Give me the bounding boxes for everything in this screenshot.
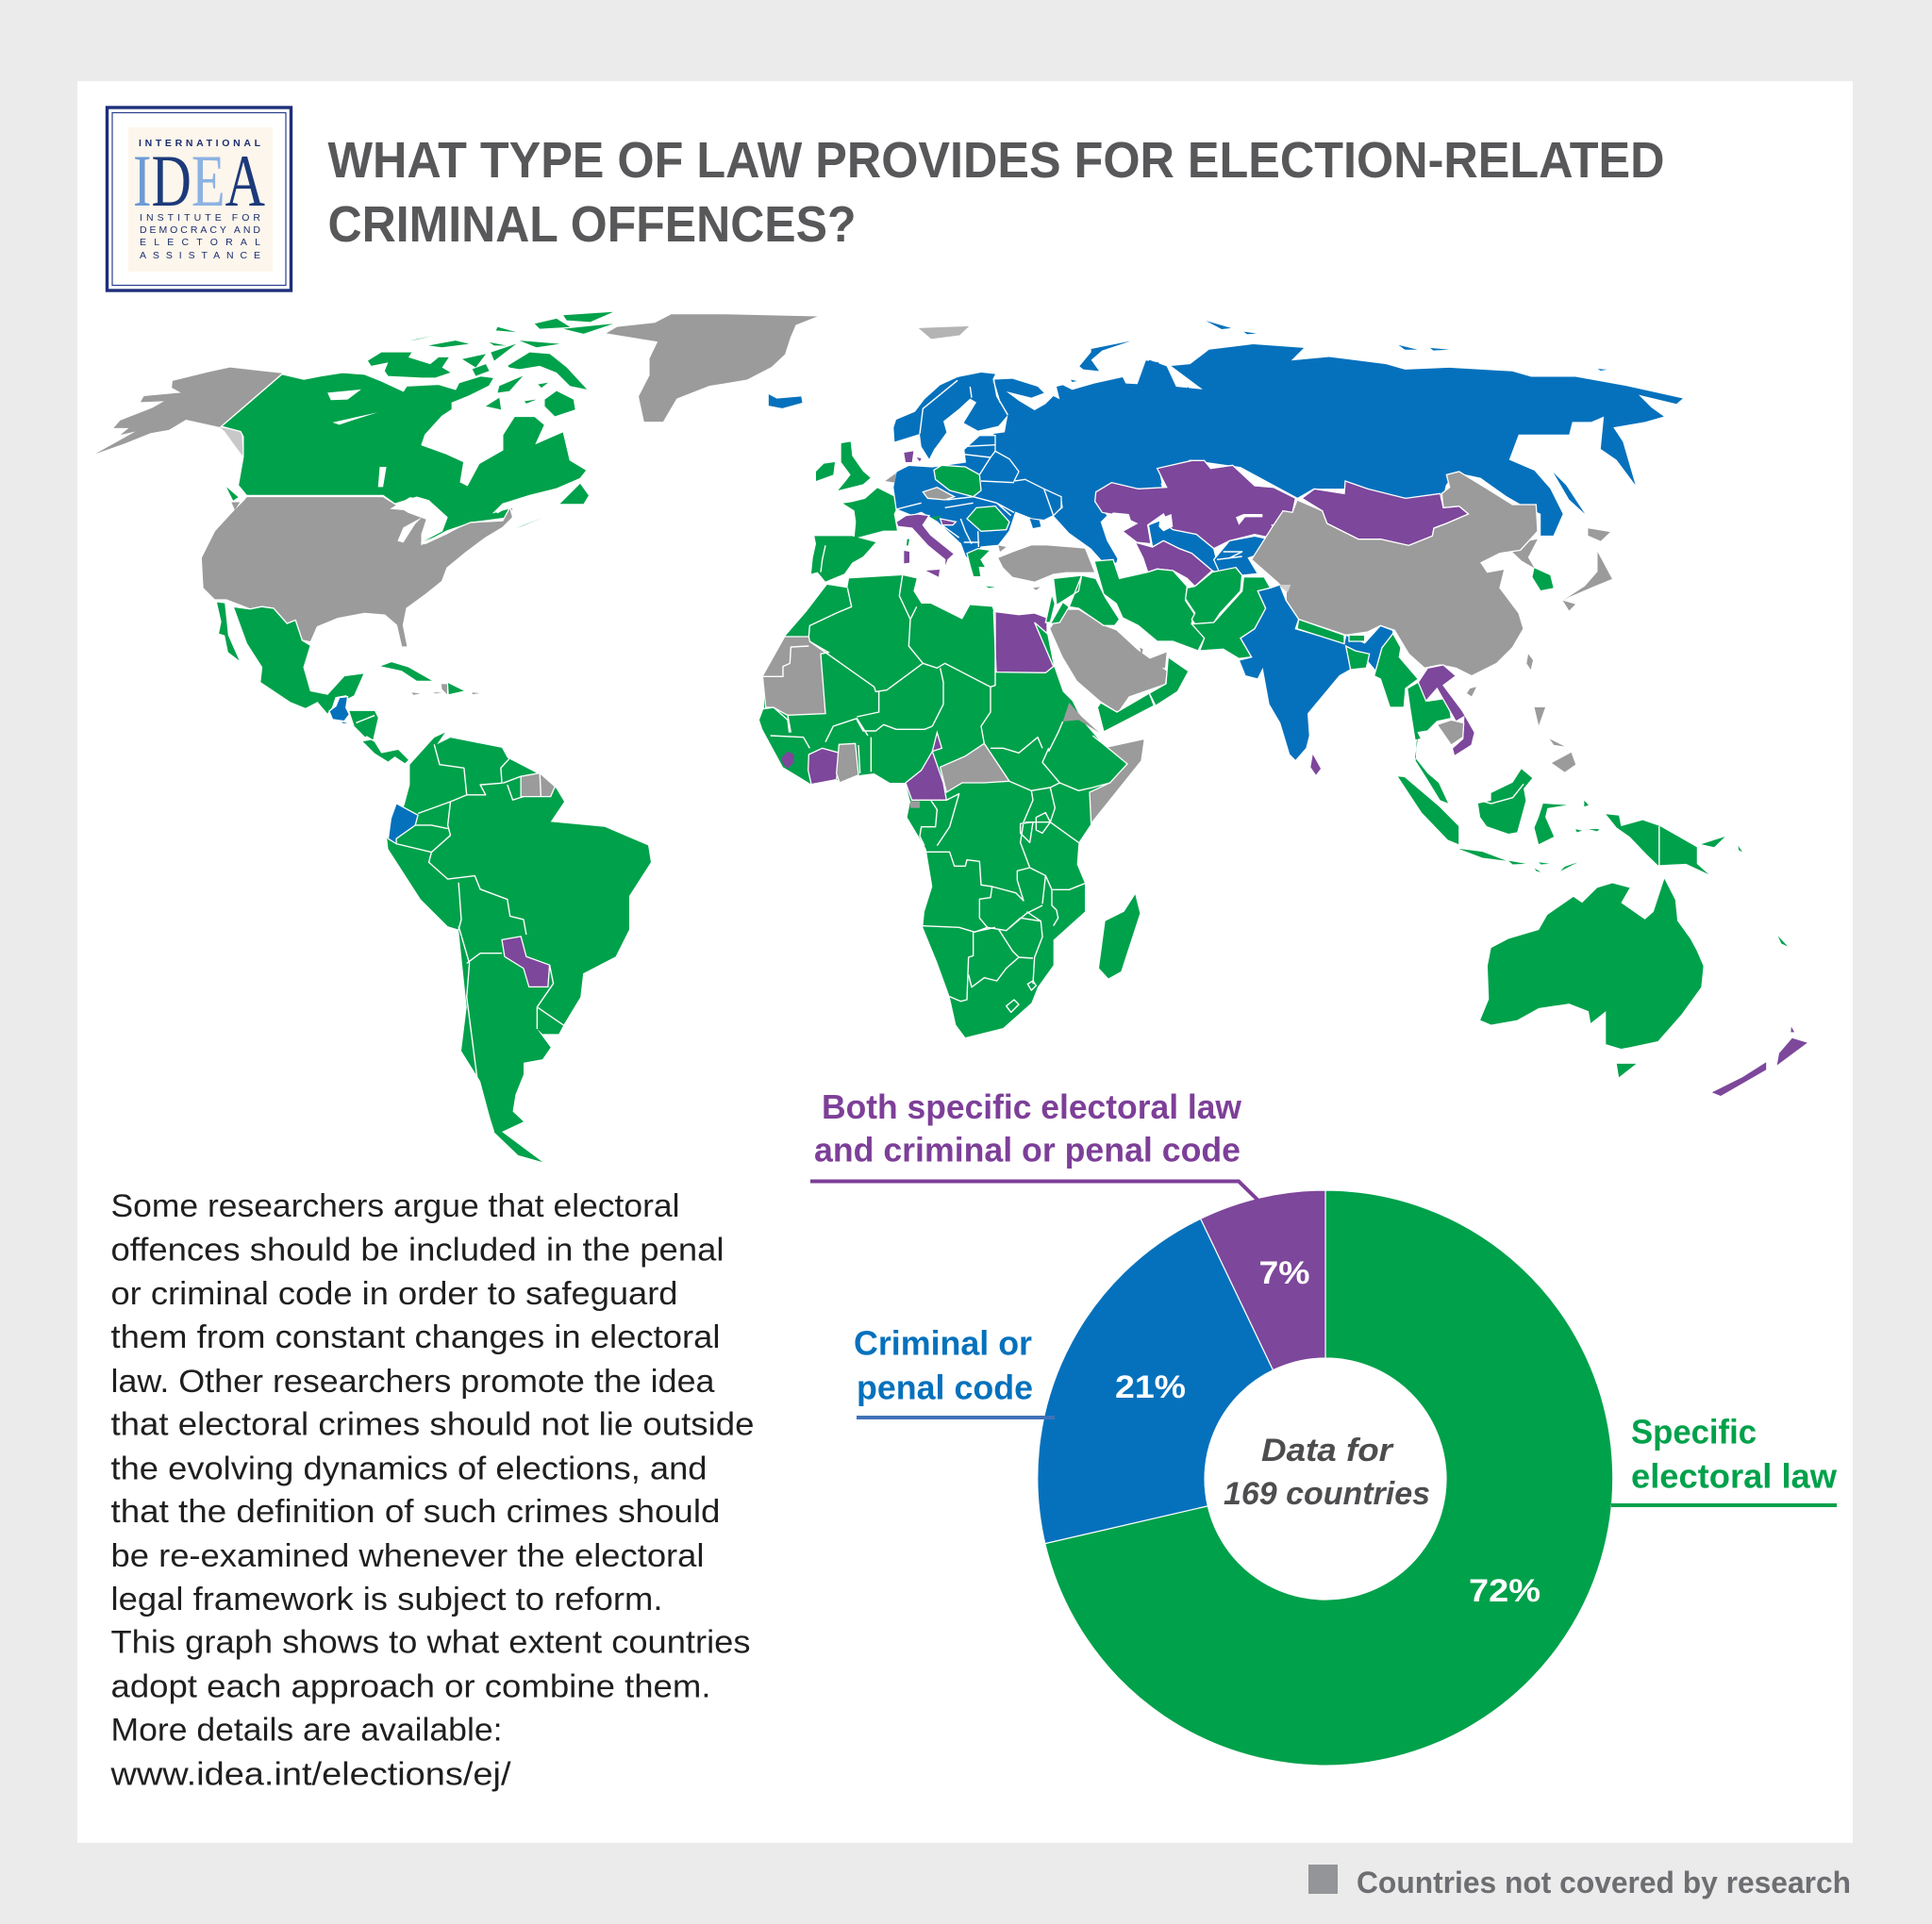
Netherlands [885,473,896,483]
Afghanistan [1186,568,1242,624]
Croatia [941,519,956,533]
Malay peninsula [1415,736,1448,804]
centre label: 169 countries [1224,1476,1430,1512]
text block: explanation: that electoral crimes should not lie outside [111,1407,755,1443]
logo: International IDEA: ELECTORAL [140,237,260,248]
logo: International IDEA: ASSISTANCE [140,250,260,261]
text block: explanation: legal framework is subject to reform. [111,1582,662,1617]
Spain and Portugal [811,536,875,582]
Guatemala and El Salvador [329,697,353,724]
Ivory Coast [808,748,840,785]
percentage labels: 21% [1115,1369,1186,1405]
New Zealand [1712,1027,1807,1096]
callout: both: Both specific electoral law [822,1087,1242,1126]
Russia (Siberia) [1102,344,1683,536]
Central African Republic [941,743,1009,792]
Philippines [1535,707,1575,772]
Equatorial Guinea [910,801,920,808]
map: Central, South and East Asia [1094,460,1538,804]
callout: both [810,1087,1257,1200]
lakes [327,390,466,544]
Thailand [1407,682,1451,740]
logo: International IDEA: IDEA [133,140,265,222]
Kyrgyzstan and Tajikistan [1214,536,1276,575]
African borders [762,575,1110,1002]
St Lawrence estuary [494,495,537,513]
Novaya Zemlya [1071,341,1130,382]
Ghana [837,743,858,783]
Cambodia [1437,720,1464,745]
New Guinea [1606,814,1708,874]
Alaska [95,368,282,454]
Scandinavia and Finland [893,373,1008,459]
Iran [1094,559,1205,651]
text block: explanation: or criminal code in order to safeguard [111,1276,678,1312]
Eritrea [1063,703,1099,733]
Crimea [1030,519,1041,528]
segment: criminal or penal code 21% [1038,1219,1274,1544]
Czech Republic [923,488,955,500]
Slovenia [931,516,941,521]
Australia [1480,879,1704,1049]
Cyprus and Crete [1033,587,1041,590]
Nepal [1297,620,1344,644]
Yemen [1097,693,1154,732]
Iceland [769,394,802,408]
Corsica [907,539,909,545]
Mexico [233,606,364,714]
Romania [967,506,1009,531]
text block: explanation: www.idea.int/elections/ej/ [109,1756,511,1792]
text block: explanation: them from constant changes in electoral [111,1319,721,1355]
title [328,132,1664,253]
Central America [349,711,408,763]
percentage labels: 7% [1258,1255,1309,1291]
callout: specific electoral law: Specific [1631,1413,1757,1451]
Solomon and other islands [1584,801,1788,947]
Caribbean islands [381,662,464,694]
Italy, Sicily, Sardinia [896,514,955,569]
text block: explanation: adopt each approach or combine them. [111,1669,711,1705]
India [1239,585,1393,761]
France and Belgium [841,488,901,539]
Japan [1563,528,1612,610]
Caspian Sea [1101,512,1146,578]
text block: explanation: Some researchers argue that electoral [111,1188,679,1224]
percentage labels [1115,1255,1541,1609]
Kashmir hatch [1278,585,1291,592]
Paraguay [502,937,550,987]
logo: International IDEA [108,108,291,290]
donut chart [1038,1190,1613,1766]
Madagascar [1099,894,1140,978]
Sri Lanka [1310,755,1321,775]
Liberia [781,752,794,769]
callout: criminal or penal code: penal code [857,1368,1033,1407]
Lesotho and Eswatini [1007,981,1036,1012]
Aral Sea [1158,514,1173,531]
logo: International IDEA: INTERNATIONAL [139,138,261,149]
Greece [967,549,991,577]
segment: both 7% [1201,1190,1325,1370]
callout: criminal or penal code: Criminal or [854,1324,1032,1363]
logo: International IDEA: INSTITUTE FOR [140,212,260,224]
Sumatra [1398,776,1458,844]
UAE and Qatar [1140,648,1167,668]
Myanmar [1374,634,1418,707]
text block: explanation: This graph shows to what extent countries [111,1625,750,1661]
Egypt [993,611,1054,672]
Turkmenistan [1135,540,1212,587]
logo: International IDEA: DEMOCRACY AND [140,224,260,236]
world map [95,312,1807,1162]
Tasmania [1617,1064,1636,1077]
Java and Lesser Sunda [1458,829,1599,872]
title: WHAT TYPE OF LAW PROVIDES FOR ELECTION-RELATED [328,132,1664,189]
Western Sahara and Mauritania [762,637,828,715]
Taiwan and Hainan [1467,654,1533,696]
Bangladesh [1346,646,1370,670]
Suriname and French Guiana [521,773,555,797]
text block: explanation: be re-examined whenever the electoral [111,1538,705,1574]
Bhutan [1349,635,1365,641]
Baja California [217,603,240,660]
centre label [1224,1433,1430,1512]
Syria, Iraq, Jordan, Israel [1045,575,1120,625]
callout: specific electoral law: electoral law [1631,1457,1838,1496]
Mongolia [1302,481,1469,545]
callout: criminal or penal code [854,1324,1055,1418]
centre label: Data for [1261,1433,1394,1468]
Ecuador [388,804,418,844]
segment: specific electoral law 72% [1045,1190,1613,1766]
Poland [934,465,981,497]
Laos and Vietnam [1418,665,1474,756]
UK [838,441,871,490]
map: UK, Ireland, France, Iberia [811,441,901,582]
Somalia [1090,738,1144,823]
Canadian Arctic islands [226,312,613,528]
text block: explanation: that the definition of such crimes should [111,1494,721,1530]
Africa silhouette [759,575,1144,1037]
Uzbekistan [1148,521,1220,573]
Ireland [816,462,835,481]
text block: explanation: More details are available: [111,1712,502,1748]
text block: explanation: offences should be included in the penal [111,1233,724,1269]
Saudi Arabia [1050,610,1167,712]
Denmark [904,451,922,462]
Pakistan [1191,577,1271,658]
Central and Eastern Europe [893,436,1061,563]
Oman [1149,657,1189,705]
map: Southeast Asia and Oceania [1398,707,1807,1096]
USA [201,496,513,647]
text block: explanation: law. Other researchers promote the idea [111,1364,715,1400]
map: Europe and European Russia [885,341,1189,590]
map: Africa and Arabia [759,575,1189,1037]
text block: explanation: the evolving dynamics of elections, and [111,1451,708,1486]
Greenland [607,314,818,422]
Borneo [1478,769,1532,834]
map: South America [387,733,651,1162]
Kazakhstan [1095,460,1295,549]
Russian Arctic islands and Sakhalin [1206,321,1607,514]
Cameroon [906,733,946,800]
European Russia [992,360,1189,563]
Sulawesi [1535,804,1567,844]
title: CRIMINAL OFFENCES? [328,196,857,253]
percentage labels: 72% [1469,1573,1541,1609]
China [1252,472,1538,676]
Turkey [998,545,1094,582]
Lake Balkhash [1236,514,1262,525]
South American borders [396,744,564,1132]
map: Greenland and Iceland [607,314,818,422]
legend: countries not covered: Countries not covered by research [1357,1866,1851,1899]
text block: explanation [109,1188,754,1792]
map: Eurasia east, Russia [919,321,1683,610]
callout: specific electoral law [1611,1413,1838,1505]
callout: both: and criminal or penal code [814,1131,1241,1169]
Svalbard [919,326,969,339]
Korean peninsula [1512,539,1538,568]
Canada [222,373,587,542]
map: North and Central America [95,312,613,763]
